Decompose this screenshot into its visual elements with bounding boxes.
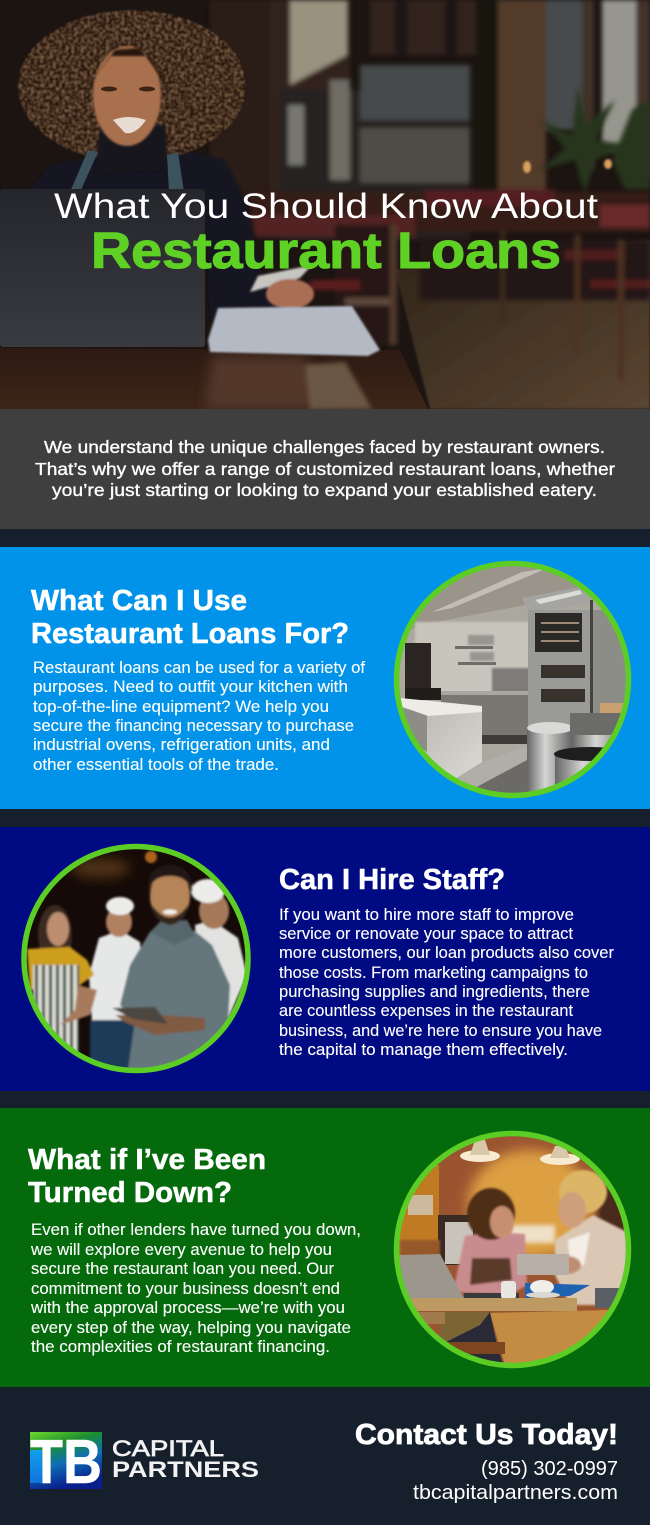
body text: purchasing supplies and ingredients, there xyxy=(279,982,590,1001)
hero photo: restaurant owner at laptop xyxy=(0,0,650,409)
heading: Can I Hire Staff? xyxy=(279,864,505,896)
body text: secure the financing necessary to purchase xyxy=(33,716,354,735)
photo: two women at cafe table xyxy=(390,1125,635,1375)
heading: Turned Down? xyxy=(28,1177,232,1209)
body text: business, and we’re here to ensure you have xyxy=(279,1021,602,1040)
body text: more customers, our loan products also cover xyxy=(279,943,614,962)
body text: Even if other lenders have turned you down, xyxy=(31,1220,361,1239)
photo: commercial kitchen xyxy=(390,555,640,805)
body text: we will explore every avenue to help you xyxy=(30,1240,332,1259)
tables and floor xyxy=(395,240,650,409)
woman: body, hair and face xyxy=(18,10,285,320)
title line 1: What You Should Know About xyxy=(54,187,598,226)
body text: other essential tools of the trade. xyxy=(33,755,279,774)
heading: What Can I Use xyxy=(31,585,247,617)
title line 2: Restaurant Loans xyxy=(91,222,561,279)
panel: what can I use loans for xyxy=(0,547,650,809)
title xyxy=(54,187,598,279)
logo: TB Capital Partners: TB xyxy=(30,1428,102,1497)
hand and card xyxy=(250,265,314,309)
body text: the complexities of restaurant financing. xyxy=(31,1337,330,1356)
intro text: you’re just starting or looking to expand your established eatery. xyxy=(52,480,597,500)
left woman xyxy=(37,904,73,950)
contact heading: Contact Us Today! xyxy=(355,1419,618,1451)
tablet xyxy=(517,1254,569,1275)
body text: Restaurant loans can be used for a variety of xyxy=(33,658,365,677)
papers xyxy=(208,306,380,356)
right chef xyxy=(195,920,247,1020)
ring xyxy=(24,846,248,1070)
laptop xyxy=(0,189,205,347)
heading: What if I’ve Been xyxy=(28,1144,266,1176)
woman left xyxy=(453,1232,527,1295)
footer xyxy=(30,1419,618,1504)
heading xyxy=(28,1144,266,1209)
ring xyxy=(396,1134,628,1366)
body text: commitment to your business doesn’t end xyxy=(31,1279,340,1298)
logo: TB Capital Partners xyxy=(30,1428,259,1497)
body text: those costs. From marketing campaigns to xyxy=(279,963,588,982)
tables xyxy=(410,1298,577,1311)
intro text xyxy=(35,437,615,500)
candles xyxy=(523,159,612,173)
website: tbcapitalpartners.com xyxy=(413,1481,618,1504)
ring xyxy=(396,564,628,796)
body text: purposes. Need to outfit your kitchen with xyxy=(33,677,348,696)
heading xyxy=(31,585,349,650)
panel: can I hire staff xyxy=(0,827,650,1091)
body text: secure the restaurant loan you need. Our xyxy=(31,1259,334,1278)
logo: TB Capital Partners: CAPITAL xyxy=(112,1436,224,1461)
body text: industrial ovens, refrigeration units, and xyxy=(33,735,330,754)
body text: service or renovate your space to attract xyxy=(279,924,573,943)
body text: are countless expenses in the restaurant xyxy=(279,1001,573,1020)
middle chef xyxy=(89,930,145,1022)
body text: the capital to manage them effectively. xyxy=(279,1040,568,1059)
logo: TB Capital Partners: PARTNERS xyxy=(112,1457,259,1482)
body text xyxy=(279,905,614,1059)
body text: every step of the way, helping you navigate xyxy=(31,1318,351,1337)
body text: If you want to hire more staff to improve xyxy=(279,905,574,924)
panel: what if I've been turned down xyxy=(0,1108,650,1387)
photo: restaurant staff xyxy=(20,840,255,1080)
laptop xyxy=(399,1254,464,1298)
heading: Restaurant Loans For? xyxy=(31,618,349,650)
body text xyxy=(30,1220,361,1356)
body text: top-of-the-line equipment? We help you xyxy=(33,697,329,716)
intro text: That’s why we offer a range of customized restaurant loans, whether xyxy=(35,459,615,479)
intro text: We understand the unique challenges faced by restaurant owners. xyxy=(44,437,605,457)
man in grey shirt xyxy=(120,922,230,1070)
body text xyxy=(33,658,365,774)
woman right xyxy=(555,1215,627,1305)
phone: (985) 302-0997 xyxy=(481,1457,618,1480)
plants xyxy=(540,85,650,195)
intro band xyxy=(0,409,650,529)
body text: with the approval process—we’re with you xyxy=(30,1298,345,1317)
table xyxy=(0,348,428,409)
